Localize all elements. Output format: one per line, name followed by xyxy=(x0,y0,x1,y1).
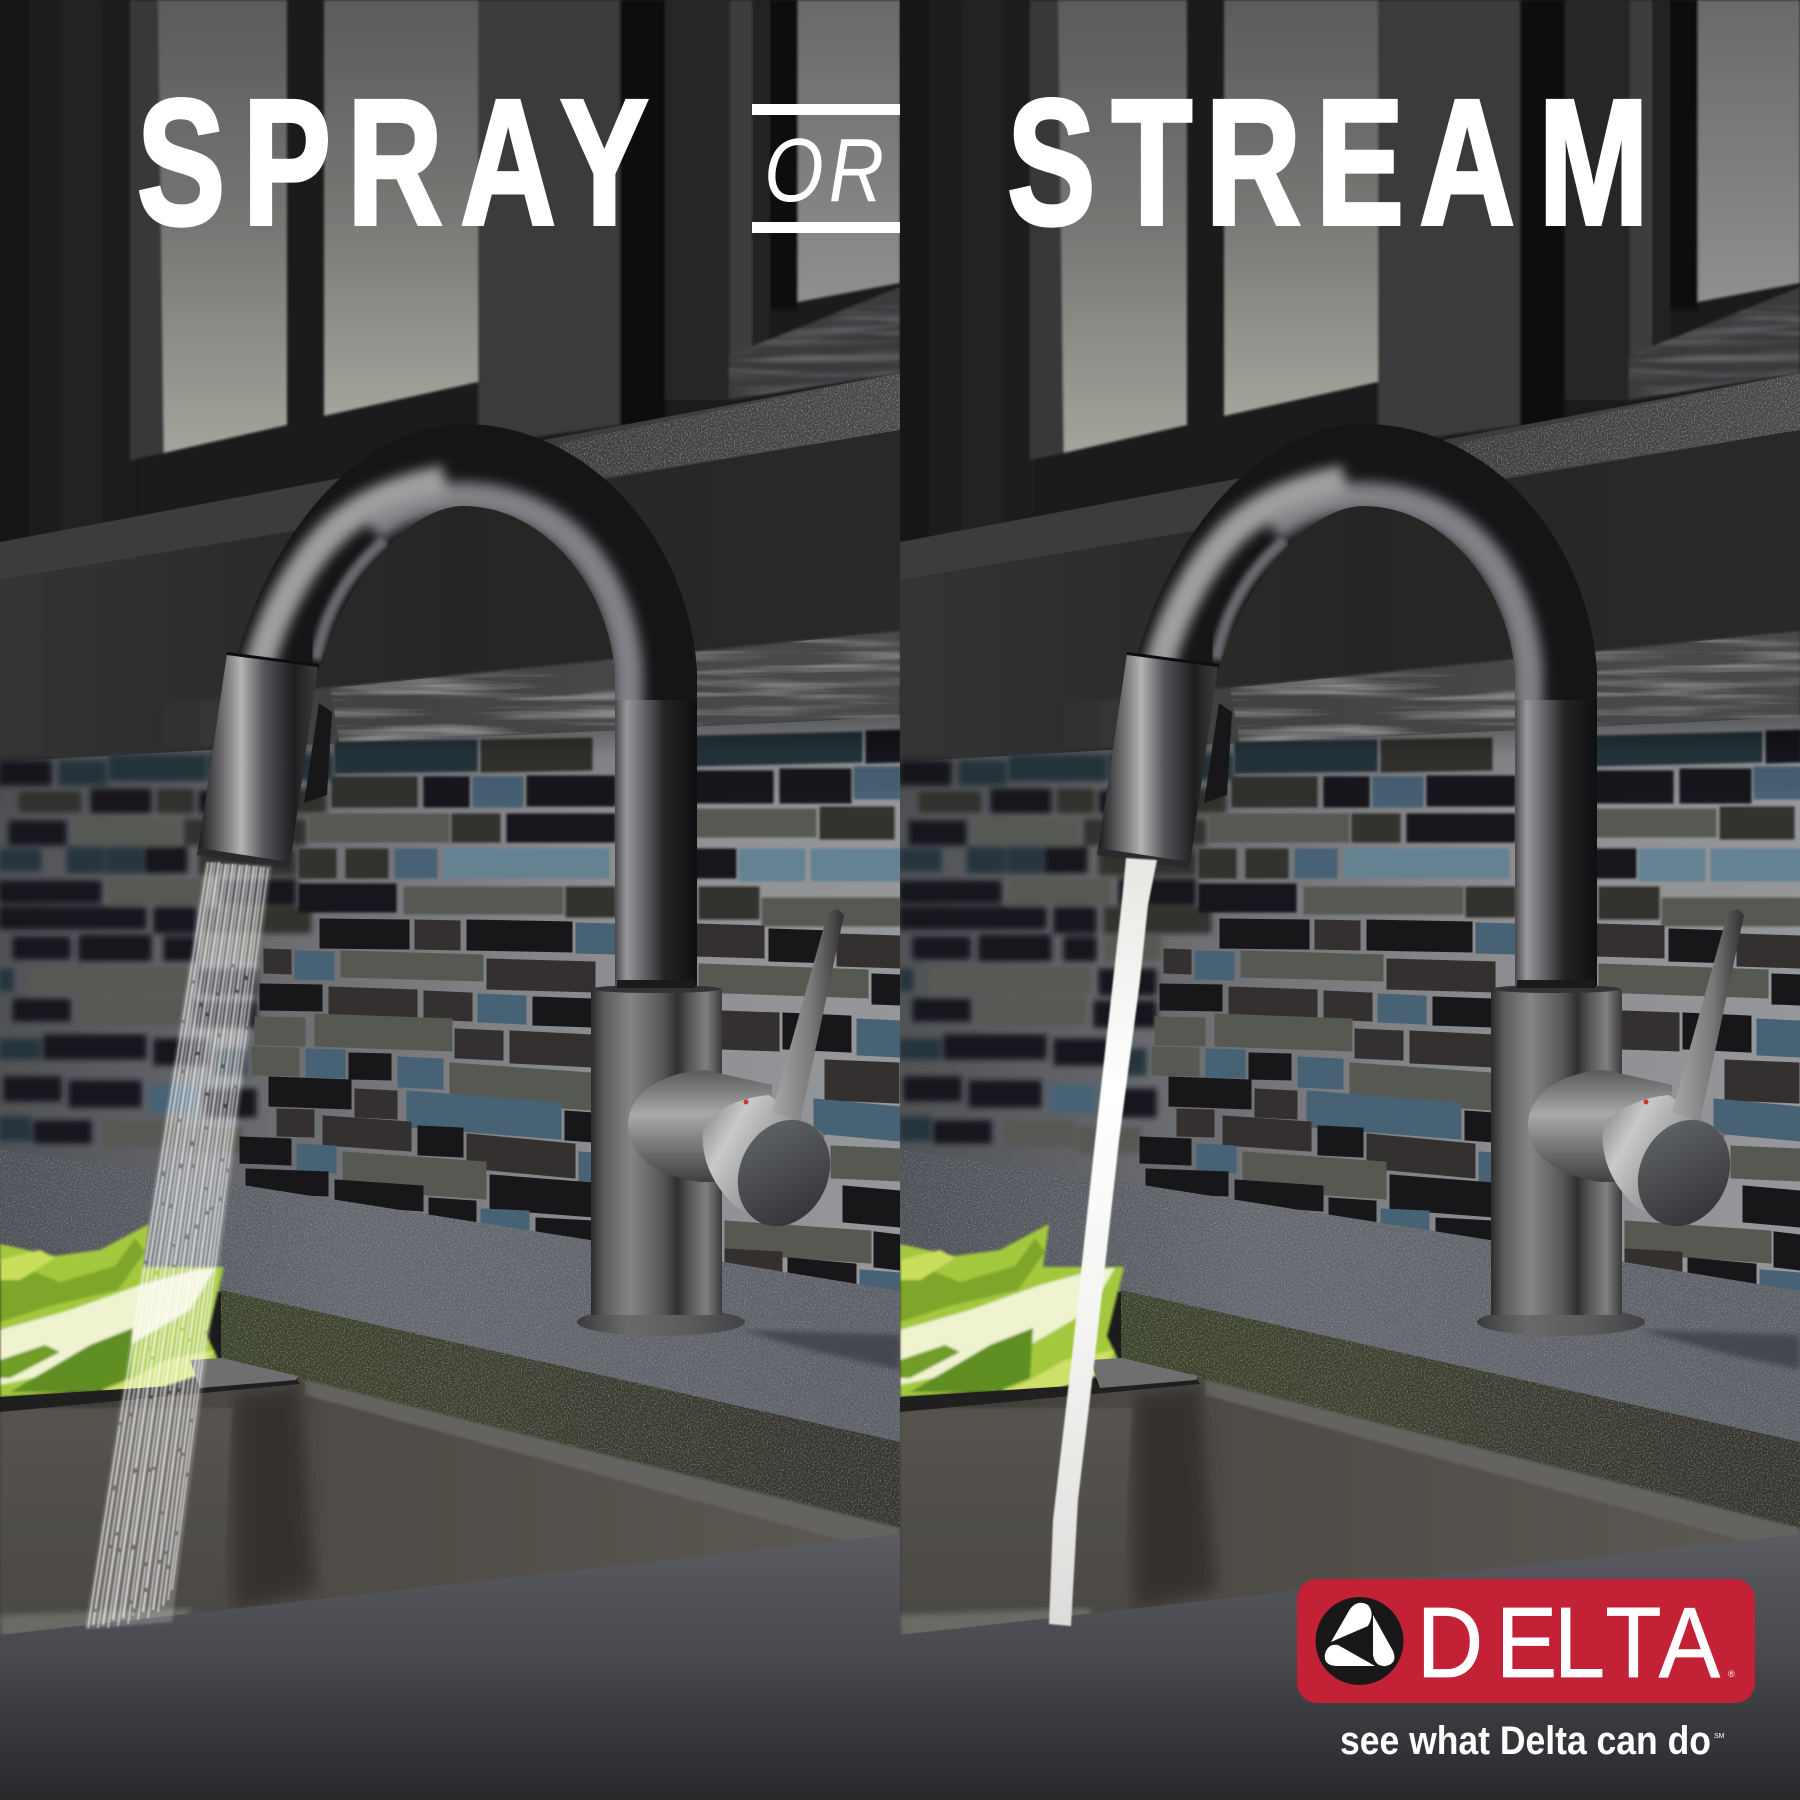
kitchen scene with faucet xyxy=(900,0,1800,1800)
tagline: SM xyxy=(1714,1733,1725,1740)
wordmark: DELTA: DELTA xyxy=(1417,1587,1720,1699)
icon: Delta triangle mark xyxy=(1316,1597,1404,1685)
panel: stream photo xyxy=(900,0,1800,1800)
logo: Delta badge xyxy=(1297,1579,1755,1703)
tagline: see what Delta can do xyxy=(1340,1719,1711,1763)
water stream xyxy=(1049,858,1157,1626)
water spray xyxy=(85,862,272,1629)
kitchen scene with faucet xyxy=(0,0,900,1800)
title: SPRAY: SPRAY xyxy=(137,63,649,263)
title: STREAM: STREAM xyxy=(1007,63,1649,263)
divider: OR xyxy=(752,104,900,233)
divider: OR: OR xyxy=(764,119,884,220)
logo: Delta badge: ® xyxy=(1728,1669,1735,1679)
panel: spray photo xyxy=(0,0,900,1800)
